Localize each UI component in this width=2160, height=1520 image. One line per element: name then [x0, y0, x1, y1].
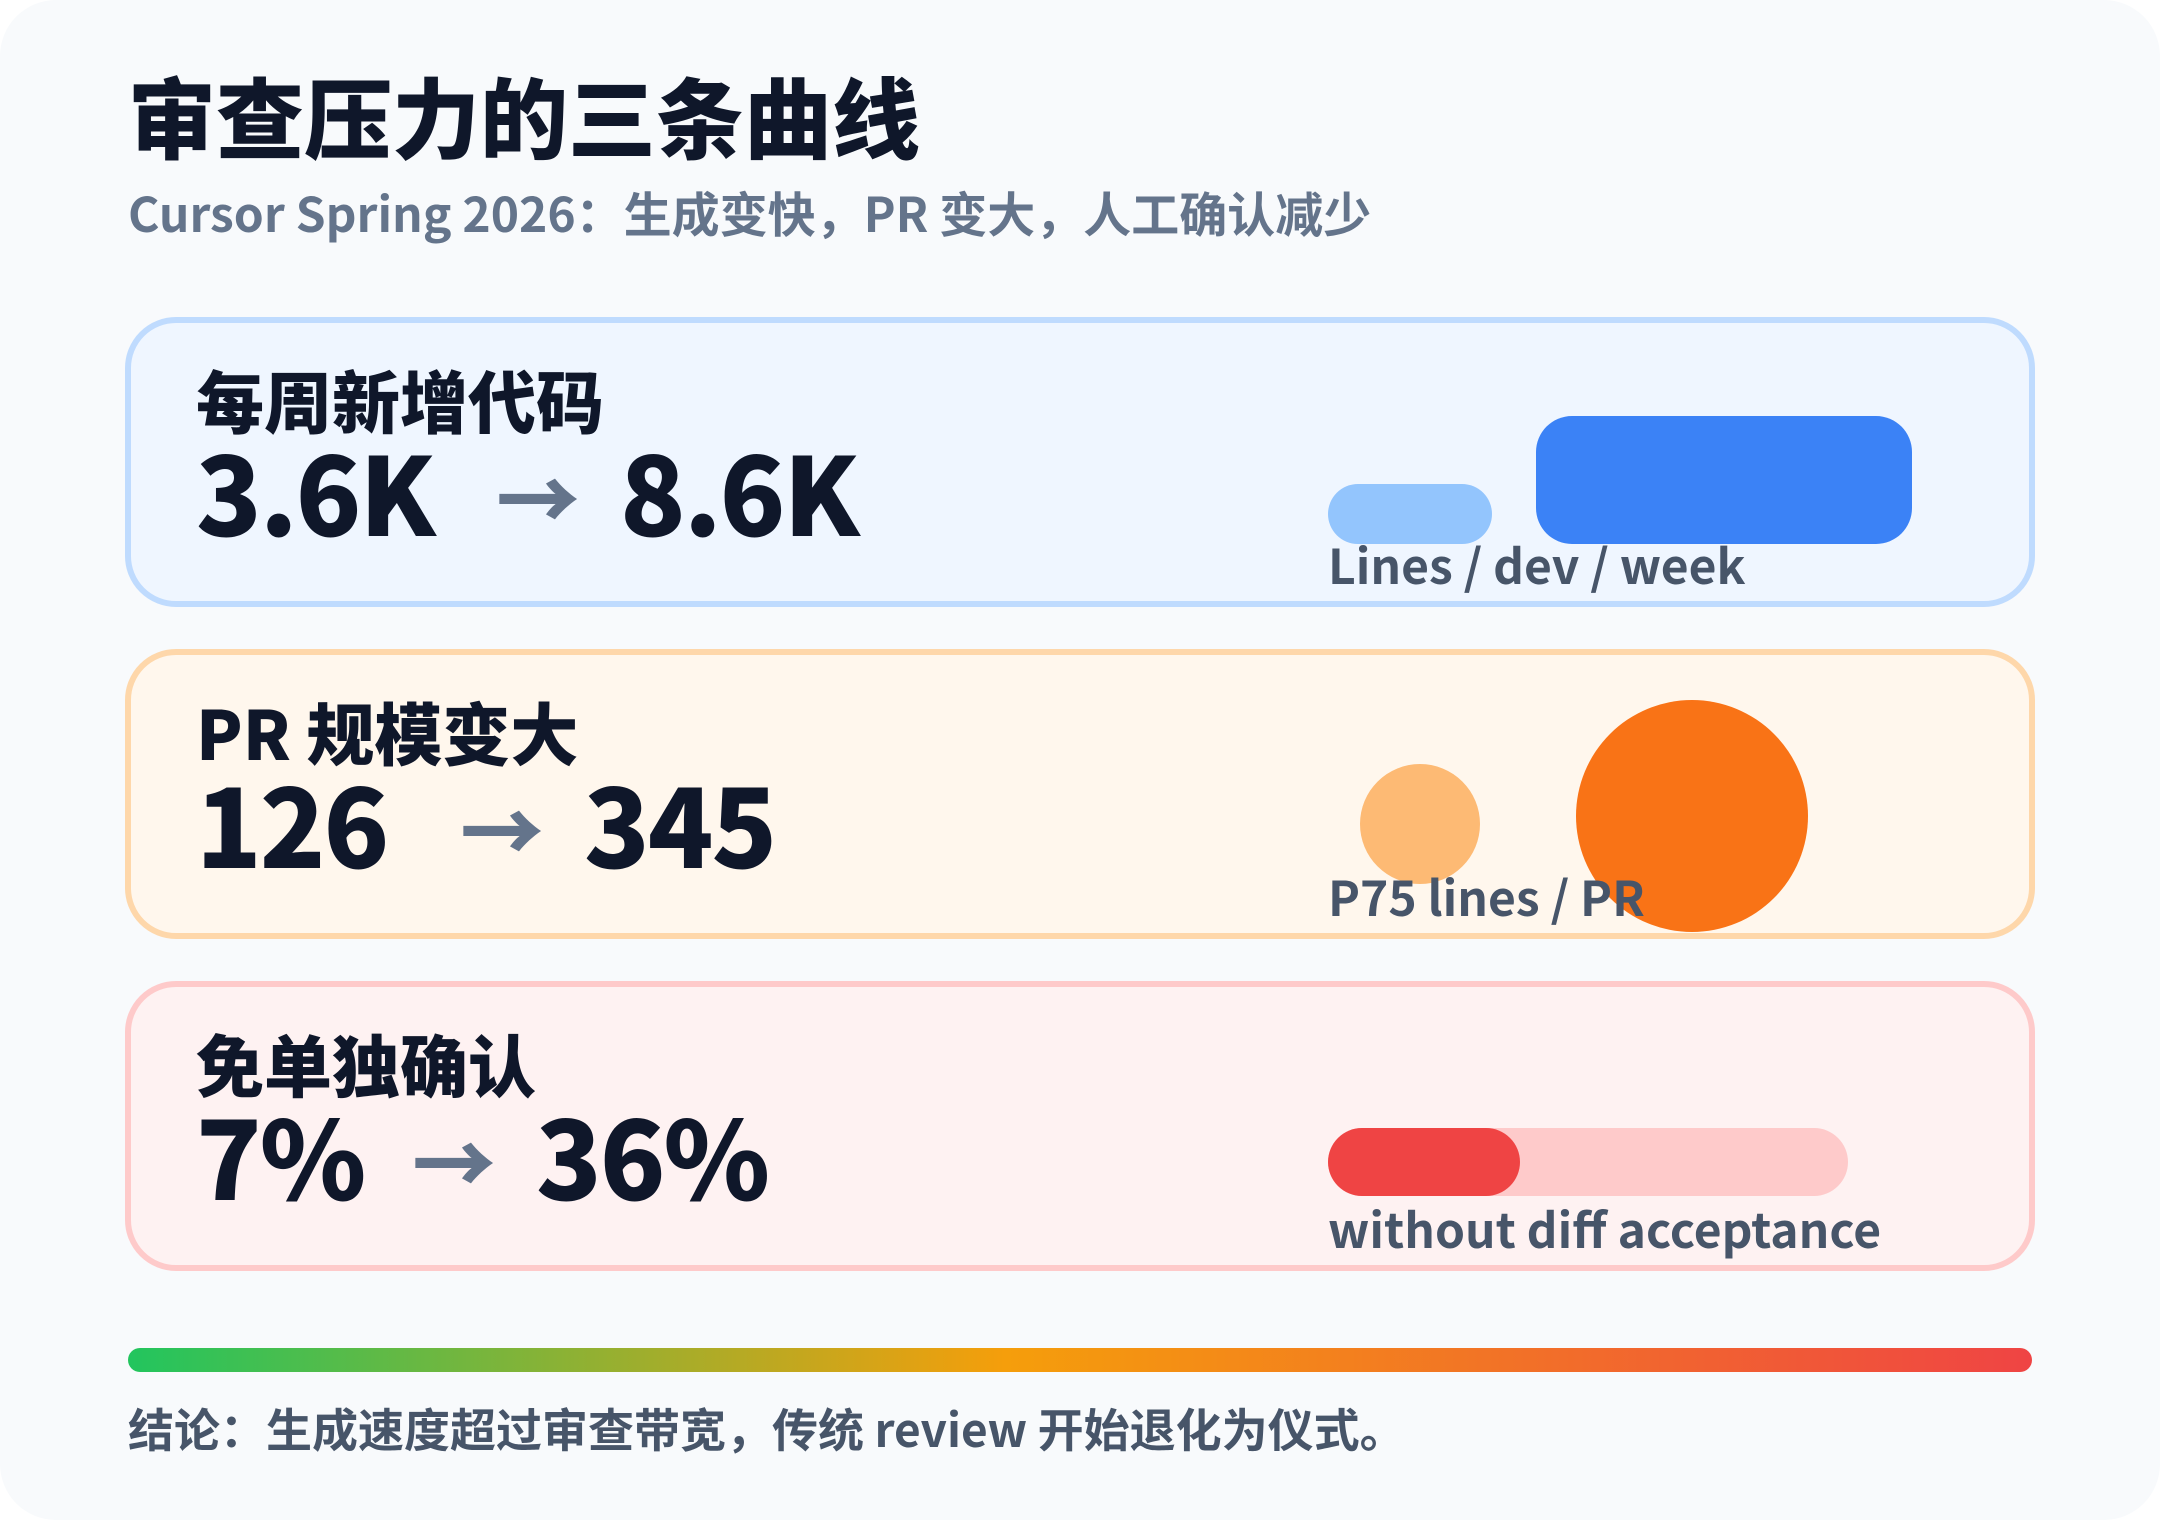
bar: after [1536, 416, 1912, 544]
panel: weekly new code [128, 320, 2032, 604]
gradient bar [128, 1348, 2032, 1372]
metric label: without diff acceptance [1328, 1192, 1881, 1262]
panel heading: 免单独确认 [196, 1013, 536, 1112]
title: 审查压力的三条曲线 [128, 51, 920, 178]
arrow: → [412, 1099, 496, 1220]
value: after: 345 [584, 744, 775, 900]
progress fill [1328, 1128, 1520, 1196]
circle: after [1576, 700, 1808, 932]
panel heading: 每周新增代码 [196, 349, 604, 448]
metric label: Lines / dev / week [1328, 528, 1746, 598]
panel background [128, 320, 2032, 604]
panel heading: PR 规模变大 [196, 681, 578, 780]
value: before: 7% [196, 1076, 364, 1232]
arrow: → [496, 435, 580, 556]
arrow: → [460, 767, 544, 888]
value: before: 3.6K [196, 412, 437, 568]
value: before: 126 [196, 744, 387, 900]
panel: PR size [128, 652, 2032, 936]
panel background [128, 652, 2032, 936]
value: after: 36% [536, 1076, 768, 1232]
subtitle: Cursor Spring 2026：生成变快，PR 变大，人工确认减少 [128, 176, 1371, 246]
bar: before [1328, 484, 1492, 544]
panel: without separate confirmation [128, 984, 2032, 1268]
panel background [128, 984, 2032, 1268]
conclusion: 结论：生成速度超过审查带宽，传统 review 开始退化为仪式。 [128, 1395, 1406, 1461]
progress track [1328, 1128, 1848, 1196]
value: after: 8.6K [620, 412, 861, 568]
metric label: P75 lines / PR [1328, 860, 1645, 930]
circle: before [1360, 764, 1480, 884]
